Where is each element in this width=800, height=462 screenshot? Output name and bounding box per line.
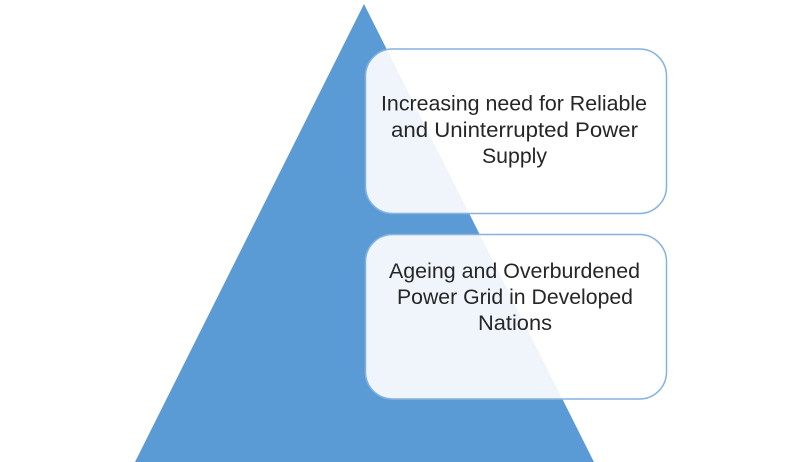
card text: reliable power supply: and Uninterrupted Power bbox=[391, 118, 638, 142]
card: reliable power supply bbox=[366, 49, 666, 214]
card text: reliable power supply: Supply bbox=[482, 144, 547, 168]
card text: reliable power supply: Increasing need for Reliable bbox=[381, 92, 647, 116]
card text: reliable power supply bbox=[381, 92, 647, 168]
card text: ageing power grid bbox=[389, 259, 640, 335]
card: ageing power grid bbox=[366, 234, 666, 399]
card text: ageing power grid: Nations bbox=[478, 311, 552, 335]
card text: ageing power grid: Power Grid in Developed bbox=[397, 285, 633, 309]
pyramid triangle bbox=[135, 4, 594, 462]
card text: ageing power grid: Ageing and Overburdened bbox=[389, 259, 640, 283]
